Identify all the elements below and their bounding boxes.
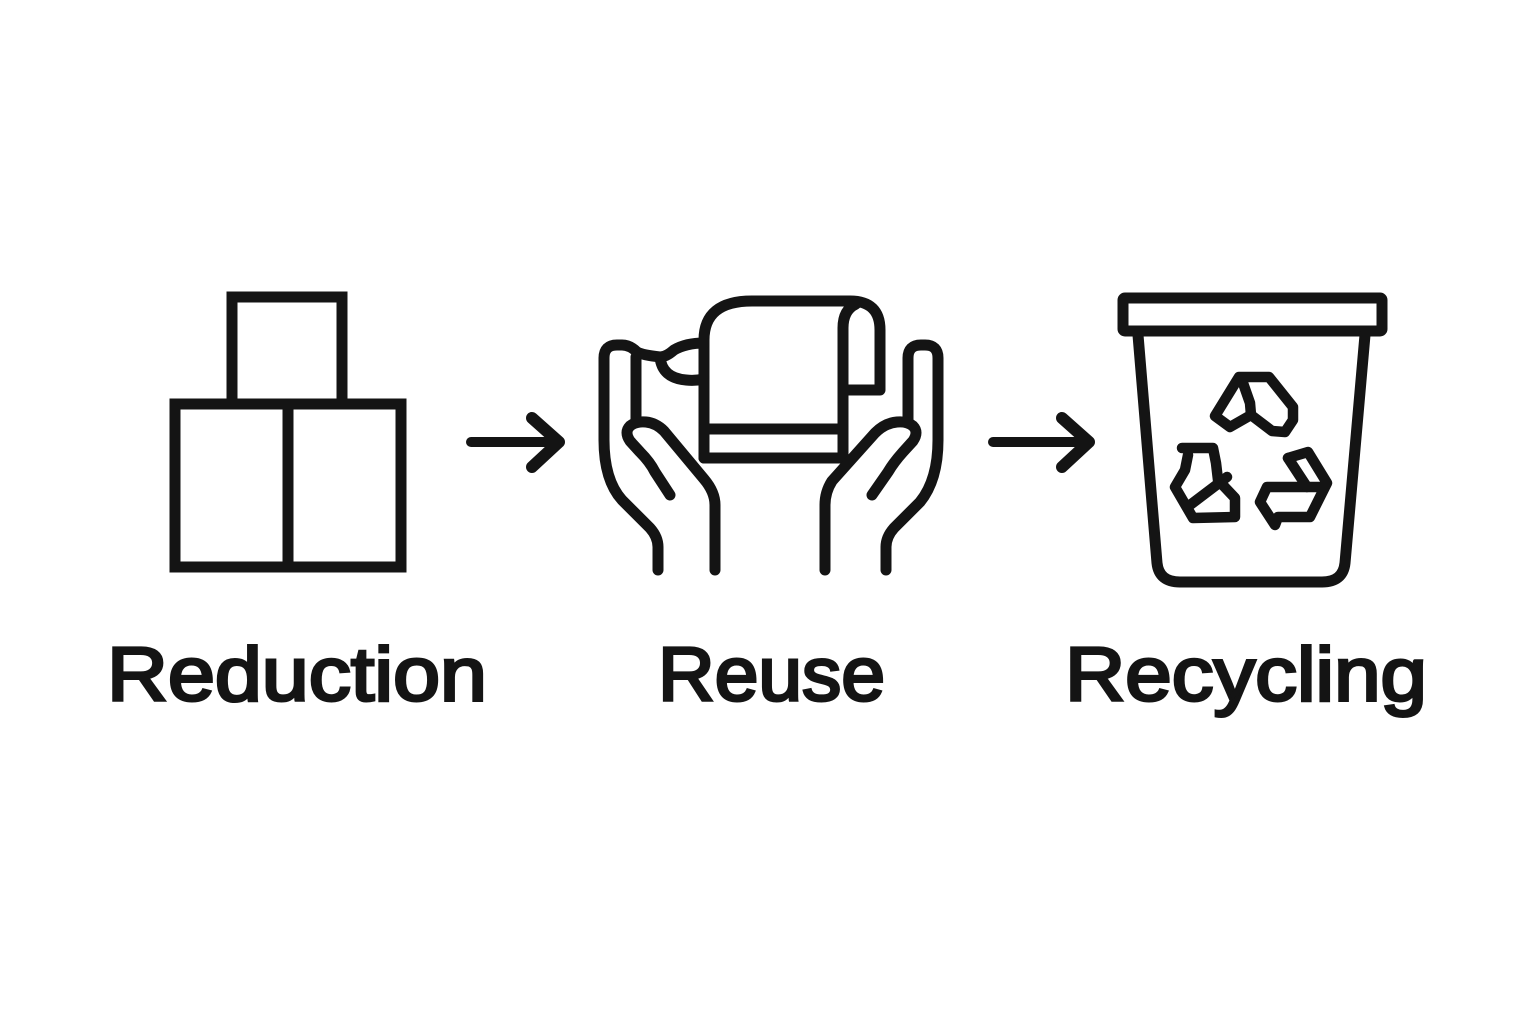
towel (704, 301, 880, 458)
icon: stacked boxes (175, 297, 401, 567)
label: Reuse: Reuse (658, 632, 885, 718)
arrow: reduction to reuse (471, 418, 559, 467)
bin body (1138, 335, 1365, 582)
left hand (604, 343, 715, 570)
label: Recycling: Recycling (1065, 632, 1427, 718)
label: Reduction: Reduction (107, 632, 487, 718)
bin lid (1123, 298, 1382, 331)
recycling symbol (1175, 377, 1327, 525)
icon: hands holding towel (604, 301, 938, 570)
icon: recycling bin (1123, 298, 1382, 582)
arrow: reuse to recycling (993, 418, 1089, 467)
right hand (825, 345, 938, 570)
